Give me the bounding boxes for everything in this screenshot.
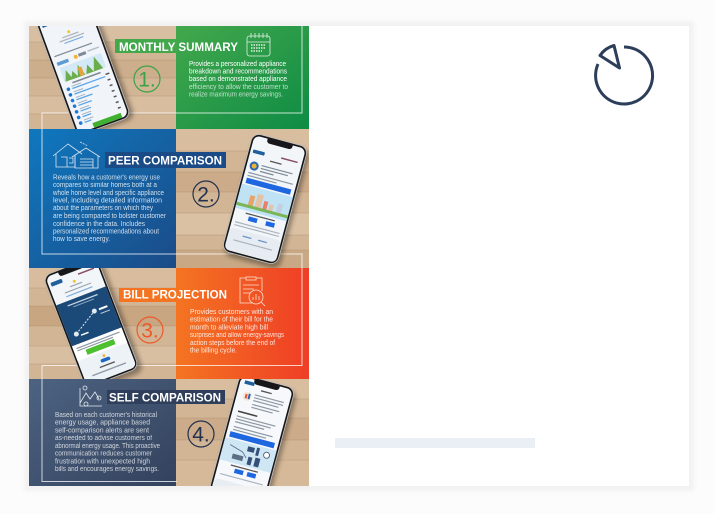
text: self comparison description: Based on each customer's historical xyxy=(55,412,157,419)
step number 4: 4. xyxy=(192,424,210,446)
phone 3: bill projection xyxy=(44,268,144,379)
step number 4 xyxy=(188,421,214,447)
heading: monthly summary: MONTHLY SUMMARY xyxy=(119,40,238,54)
text: bill projection description: month to alleviate high bill xyxy=(190,324,268,332)
text: peer comparison description: compares to similar homes both at a xyxy=(53,182,157,189)
icon: calendar xyxy=(247,33,270,56)
step number 2 xyxy=(193,181,219,207)
text: bill projection description xyxy=(190,309,284,354)
text: self comparison description: energy usage, appliance based xyxy=(55,420,150,426)
section 4: self comparison xyxy=(55,386,225,473)
text: self comparison description: abnormal energy usage. This proactive xyxy=(55,443,160,450)
text: bill projection description: estimation of their bill for the xyxy=(190,316,273,324)
icon: houses xyxy=(53,142,100,168)
icon: trend chart xyxy=(80,386,102,406)
step number 1: 1. xyxy=(138,68,156,92)
heading: bill projection: BILL PROJECTION xyxy=(123,288,227,302)
text: monthly summary description xyxy=(189,61,288,98)
step number 1 xyxy=(134,66,160,92)
text: bill projection description: action steps before the end of xyxy=(190,340,275,347)
text: monthly summary description: breakdown and recommendations xyxy=(189,68,287,76)
phone 4: self comparison xyxy=(210,379,298,486)
text: peer comparison description: Reveals how a customer's energy use xyxy=(53,174,160,182)
heading: peer comparison: PEER COMPARISON xyxy=(108,153,222,167)
text: peer comparison description xyxy=(52,174,167,243)
section 1: monthly summary xyxy=(115,33,288,98)
heading: self comparison: SELF COMPARISON xyxy=(109,390,221,404)
text: peer comparison description: whole home level and specific appliance xyxy=(52,190,164,197)
icon: clipboard with chart xyxy=(240,277,265,306)
text: self comparison description: bills and encourages energy savings. xyxy=(55,466,159,473)
step number 2: 2. xyxy=(197,184,215,206)
text: peer comparison description: how to save energy. xyxy=(53,236,110,243)
text: monthly summary description: realize maximum energy savings. xyxy=(189,92,283,98)
step number 3 xyxy=(137,317,163,343)
text: bill projection description: surprises and allow energy-savings xyxy=(190,332,284,339)
text: bill projection description: the billing cycle. xyxy=(190,348,237,354)
infographic and pie icon xyxy=(29,26,654,486)
text: peer comparison description: about the parameters on which they xyxy=(53,205,153,212)
text: self comparison description: communication reduces customer xyxy=(55,450,153,458)
phone 1: monthly summary xyxy=(37,26,136,129)
wood background xyxy=(29,26,309,486)
text: self comparison description: self-comparison alerts are sent xyxy=(55,428,149,434)
panel: peer comparison colour block xyxy=(29,129,176,268)
text: self comparison description: frustration with unexpected high xyxy=(55,458,150,466)
text: self comparison description xyxy=(55,412,160,473)
text: monthly summary description: based on demonstrated appliance xyxy=(189,76,287,83)
panel: self comparison colour block xyxy=(29,379,176,486)
text: monthly summary description: Provides a personalized appliance xyxy=(189,61,286,68)
text: self comparison description: as-needed to advise customers of xyxy=(55,435,152,442)
text: peer comparison description: personalized recommendations about xyxy=(53,228,159,236)
placeholder bar xyxy=(335,438,535,448)
text: peer comparison description: confidence in the data. Includes xyxy=(53,221,145,228)
step number 3: 3. xyxy=(141,320,159,342)
white frame lines xyxy=(42,26,302,482)
text: monthly summary description: efficiency to allow the customer to xyxy=(189,84,288,91)
text: bill projection description: Provides customers with an xyxy=(190,309,273,316)
panel: bill projection colour block xyxy=(176,268,309,379)
section 2: peer comparison xyxy=(52,142,226,243)
section 3: bill projection xyxy=(119,277,284,354)
text: peer comparison description: level, including detailed information xyxy=(53,198,162,204)
icon: pie chart xyxy=(596,46,653,104)
text: peer comparison description: are being compared to bolster customer xyxy=(53,213,167,220)
panel: monthly summary colour block xyxy=(176,26,309,129)
phone 2: peer comparison xyxy=(221,133,312,270)
